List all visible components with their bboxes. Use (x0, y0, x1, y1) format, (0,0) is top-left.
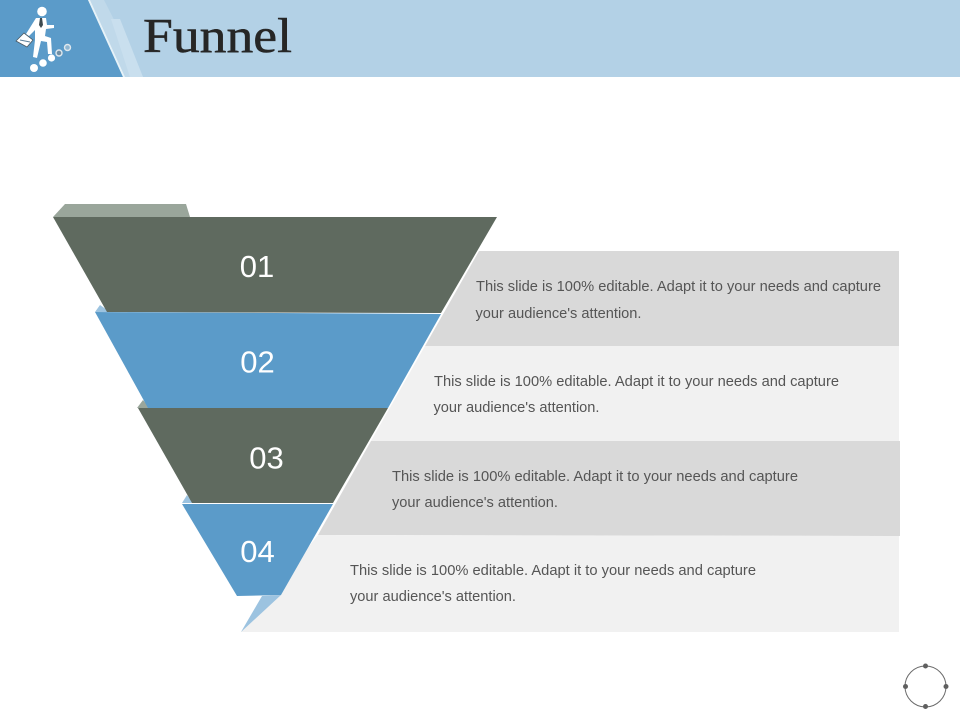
icon: businessman climbing steps (16, 7, 70, 72)
funnel layer 01: 01 (240, 249, 274, 284)
text band 4 (241, 535, 899, 632)
title: Funnel (143, 8, 292, 63)
band 2 description: This slide is 100% editable. Adapt it to your needs and capture (434, 374, 839, 390)
tail fold (241, 595, 281, 632)
icon: circle with four nodes (903, 664, 948, 709)
funnel layer 04 (182, 504, 333, 596)
text band 2: your audience's attention. (434, 400, 600, 416)
funnel layer 02: 02 (240, 344, 275, 380)
text band 2 (371, 346, 899, 441)
funnel layer 03: 03 (249, 440, 284, 476)
fold tabs (95, 305, 110, 312)
text band 3: your audience's attention. (392, 495, 558, 511)
header banner (0, 0, 960, 77)
funnel layer 02 (95, 312, 441, 408)
text band 1 (425, 251, 899, 346)
back tab (53, 204, 190, 217)
band 3 description: This slide is 100% editable. Adapt it to your needs and capture (392, 469, 798, 485)
funnel layer 03 (138, 408, 388, 503)
band 1 description: This slide is 100% editable. Adapt it to your needs and capture (476, 279, 881, 295)
text band 1: your audience's attention. (476, 306, 642, 322)
funnel (53, 204, 497, 632)
text band 4: your audience's attention. (350, 589, 516, 605)
funnel layer 01 (53, 217, 497, 313)
text band 3 (318, 441, 900, 536)
band 4 description: This slide is 100% editable. Adapt it to your needs and capture (350, 563, 756, 579)
funnel layer 04: 04 (240, 534, 275, 569)
icon: briefcase (16, 33, 33, 47)
